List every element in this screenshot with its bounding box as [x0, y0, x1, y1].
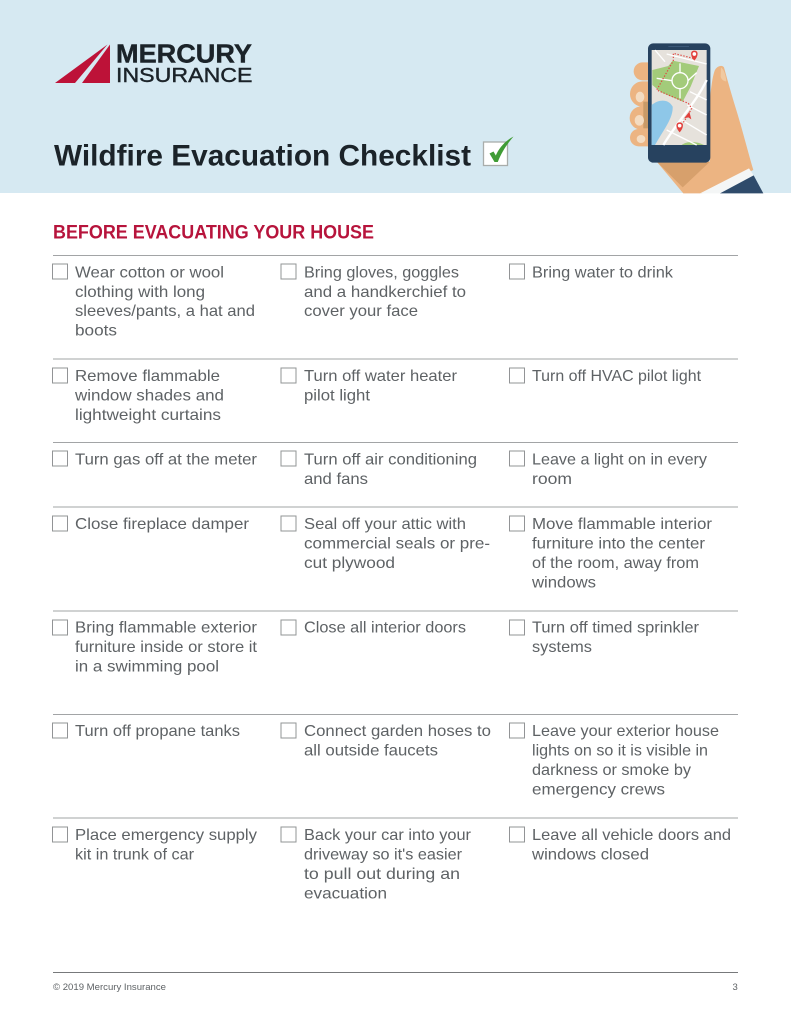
roads — [655, 50, 707, 145]
item: remove flammable shades: lightweight curtains — [75, 407, 221, 424]
item: bring water: Bring water to drink — [532, 264, 673, 282]
footer — [53, 972, 738, 993]
item: vehicle doors — [510, 827, 731, 864]
phone body — [648, 43, 710, 163]
item: HVAC: Turn off HVAC pilot light — [532, 368, 702, 385]
cuff — [700, 168, 754, 193]
icon: green check in box — [484, 136, 514, 166]
item: sprinklers: systems — [532, 639, 592, 656]
item: garden hoses: all outside faucets — [304, 742, 438, 760]
item: wear cotton: clothing with long — [75, 284, 205, 301]
item: move furniture: furniture into the center — [532, 536, 705, 552]
item: garden hoses — [281, 723, 491, 760]
item: back your car: Back your car into your — [304, 827, 471, 844]
item: emergency kit — [52, 827, 257, 864]
item: vehicle doors: windows closed — [531, 846, 649, 864]
park — [652, 61, 699, 102]
item: vehicle doors: Leave all vehicle doors and — [532, 827, 731, 844]
item: exterior furniture: in a swimming pool — [75, 658, 219, 676]
hand — [657, 66, 753, 193]
item: water heater — [281, 368, 457, 404]
item: exterior lights: emergency crews — [532, 782, 665, 798]
item: air conditioning: and fans — [304, 471, 368, 488]
phone speaker — [668, 45, 689, 48]
item: remove flammable shades — [52, 368, 224, 424]
item: exterior furniture: Bring flammable exterior — [75, 620, 257, 636]
item: back your car: evacuation — [304, 886, 387, 902]
route — [657, 53, 693, 127]
lake — [652, 101, 673, 145]
item: move furniture: of the room, away from — [532, 555, 699, 572]
footer: 3 — [732, 982, 738, 993]
footer: © 2019 Mercury Insurance — [53, 982, 166, 993]
item: exterior lights: Leave your exterior house — [532, 723, 719, 740]
item: wear cotton: boots — [75, 322, 117, 340]
item: move furniture — [510, 516, 712, 592]
section heading: BEFORE EVACUATING YOUR HOUSE — [53, 222, 374, 244]
palm shadow — [657, 162, 710, 187]
checklist panel — [52, 256, 738, 902]
fingers — [639, 71, 655, 138]
green corner — [682, 142, 704, 145]
item: wear cotton: sleeves/pants, a hat and — [75, 303, 255, 320]
item: garden hoses: Connect garden hoses to — [304, 723, 491, 740]
item: attic: cut plywood — [304, 555, 395, 572]
item: damper: Close fireplace damper — [75, 516, 249, 533]
item: air conditioning: Turn off air conditioning — [304, 452, 477, 468]
item: move furniture: Move flammable interior — [532, 516, 712, 533]
item: attic: commercial seals or pre- — [304, 536, 490, 552]
item: water heater: Turn off water heater — [304, 368, 457, 385]
item: move furniture: windows — [531, 574, 596, 592]
logo: Mercury Insurance — [55, 39, 252, 87]
item: attic — [281, 516, 490, 572]
item: propane: Turn off propane tanks — [75, 723, 240, 740]
item: remove flammable shades: window shades and — [74, 388, 224, 404]
item: bring gloves: Bring gloves, goggles — [304, 264, 459, 282]
item: remove flammable shades: Remove flammable — [75, 368, 220, 385]
thumb nail — [721, 67, 726, 81]
item: bring gloves: and a handkerchief to — [304, 284, 466, 301]
title: Wildfire Evacuation Checklist — [54, 140, 471, 172]
map pins — [676, 51, 698, 132]
logo: Mercury Insurance: INSURANCE — [116, 65, 252, 87]
item: back your car: to pull out during an — [304, 866, 460, 883]
item: emergency kit: Place emergency supply — [75, 827, 257, 844]
header banner — [0, 0, 791, 193]
item: attic: Seal off your attic with — [304, 516, 466, 533]
sleeve — [720, 175, 763, 193]
item: emergency kit: kit in trunk of car — [75, 846, 194, 864]
item: back your car — [281, 827, 471, 902]
item: exterior furniture: furniture inside or store it — [75, 639, 258, 656]
item: bring gloves — [281, 264, 466, 320]
item: wear cotton: Wear cotton or wool — [75, 264, 224, 282]
item: sprinklers — [510, 620, 699, 656]
item: exterior lights — [510, 723, 719, 798]
logo: Mercury Insurance: MERCURY — [116, 39, 252, 69]
item: bring gloves: cover your face — [304, 303, 418, 320]
item: air conditioning — [281, 451, 477, 488]
item: exterior lights: lights on so it is visible in — [532, 742, 708, 760]
item: sprinklers: Turn off timed sprinkler — [532, 620, 699, 636]
item: interior doors: Close all interior doors — [304, 620, 466, 636]
item: leave a light: Leave a light on in every — [532, 452, 707, 468]
item: exterior lights: darkness or smoke by — [532, 762, 691, 779]
item: water heater: pilot light — [304, 388, 371, 404]
finger shadow — [643, 102, 649, 128]
item: wear cotton — [52, 264, 255, 340]
phone screen map — [652, 50, 707, 145]
item: leave a light — [510, 451, 707, 488]
item: exterior furniture — [52, 620, 258, 676]
finger nails — [635, 92, 645, 143]
illustration: hand holding phone with map — [635, 43, 763, 193]
item: back your car: driveway so it's easier — [304, 846, 462, 864]
item: gas: Turn gas off at the meter — [75, 452, 257, 468]
item: leave a light: room — [532, 471, 572, 488]
